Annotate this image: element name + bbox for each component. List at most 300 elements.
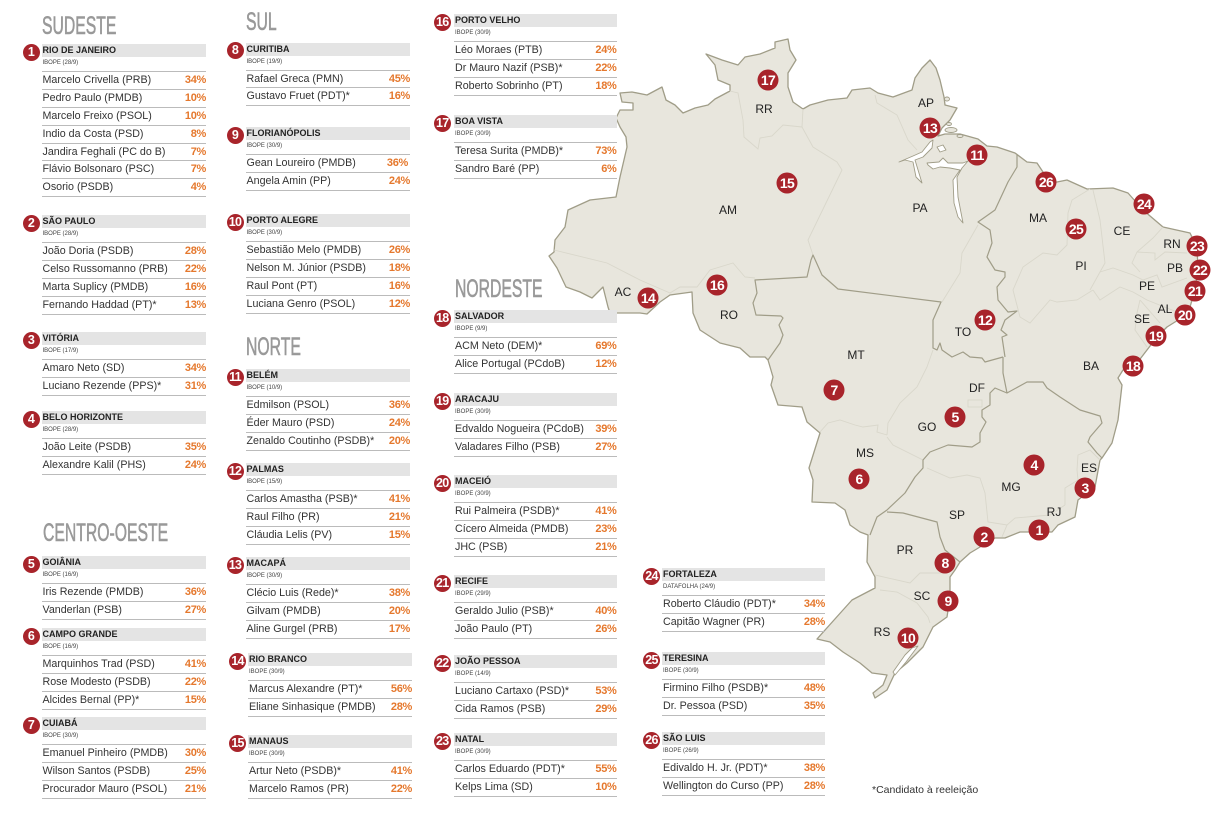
panel: Rio de Janeiro [23,44,206,197]
panel: Cuiabá: 25% [185,765,206,777]
panel: Belo Horizonte: IBOPE (28/9) [42,427,78,433]
panel: Rio Branco: IBOPE (30/9) [249,669,285,675]
panel: Natal: IBOPE (30/9) [455,749,491,755]
city marker numbers: 26 [1039,174,1054,190]
panel: Salvador: 69% [595,340,616,352]
panel: Palmas: Carlos Amastha (PSB)* [246,493,358,505]
panel: Natal [434,733,617,797]
panel: Porto Alegre: Raul Pont (PT) [246,280,317,292]
state labels: PR [897,543,914,557]
panel: Rio de Janeiro: Pedro Paulo (PMDB) [42,92,142,104]
panel: Cuiabá: 30% [185,747,206,759]
panel: Curitiba: IBOPE (19/9) [246,58,282,64]
city marker numbers: 5 [951,409,959,425]
panel: Teresina: Dr. Pessoa (PSD) [663,700,747,712]
panel: Teresina [643,652,825,716]
panel: Vitória: IBOPE (17/9) [42,348,78,354]
panel: Fortaleza: Roberto Cláudio (PDT)* [663,598,776,610]
panel: Porto Alegre: 12% [389,298,410,310]
panel: Recife [434,575,617,639]
state labels: MG [1001,480,1021,494]
state labels: RJ [1047,505,1061,519]
panel: São Paulo: 28% [185,245,206,257]
panel: Macapá: MACAPÁ [246,558,286,568]
panel: Goiânia: 5 [28,556,34,570]
city marker numbers: 4 [1030,457,1038,473]
city marker numbers: 19 [1149,328,1164,344]
city marker numbers: 16 [710,277,725,293]
panel: Aracaju [434,393,617,457]
panel: Teresina: 35% [804,700,825,712]
panel: Salvador [434,310,617,374]
heading: Sul: SUL [246,8,277,36]
panel: São Paulo: João Doria (PSDB) [42,245,133,257]
panel: Aracaju: Edvaldo Nogueira (PCdoB) [455,423,584,435]
state labels: MT [847,348,865,362]
panel: Recife: Geraldo Julio (PSB)* [455,605,554,617]
panel: Florianópolis: 36% [387,157,408,169]
panel: Porto Alegre: IBOPE (30/9) [246,230,282,236]
panel: Palmas: PALMAS [246,464,284,474]
panel: Campo Grande: 41% [185,658,206,670]
city marker numbers: 1 [1035,522,1043,538]
panel: Belém: 24% [389,417,410,429]
panel: Teresina: IBOPE (30/9) [663,668,699,674]
panel: Porto Alegre: PORTO ALEGRE [246,215,318,225]
panel: Vitória: Amaro Neto (SD) [42,362,124,374]
panel: Campo Grande: Alcides Bernal (PP)* [42,694,139,706]
panel: Palmas: Raul Filho (PR) [246,511,320,523]
panel: Maceió: Cícero Almeida (PMDB) [455,523,568,535]
panel: Manaus: 22% [391,783,412,795]
panel: Curitiba: 8 [232,43,238,57]
panel: Rio de Janeiro: 10% [185,110,206,122]
state labels: RS [874,625,890,639]
panel: Vitória: 31% [185,380,206,392]
panel: Rio de Janeiro: 7% [191,146,206,158]
panel: Belém: Zenaldo Coutinho (PSDB)* [246,435,374,447]
panel: Rio Branco [229,653,412,717]
city marker numbers: 18 [1126,358,1141,374]
panel: Manaus: 15 [231,736,244,750]
panel: Belo Horizonte: João Leite (PSDB) [42,441,131,453]
panel: Florianópolis: 9 [232,128,238,142]
panel: Campo Grande [23,628,206,710]
panel: Rio de Janeiro: Flávio Bolsonaro (PSC) [42,163,154,175]
panel: Natal: NATAL [455,734,484,744]
panel: Natal: Kelps Lima (SD) [455,781,533,793]
panel: Maceió: JHC (PSB) [455,541,507,553]
panel: Rio de Janeiro: 8% [191,128,206,140]
state labels: SE [1134,312,1150,326]
panel: Belém: BELÉM [246,370,278,380]
panel: Rio Branco: RIO BRANCO [249,654,307,664]
panel: Porto Velho: 18% [595,80,616,92]
panel: Maceió: 21% [595,541,616,553]
panel: Porto Velho: Léo Moraes (PTB) [455,44,542,56]
panel: Natal: 10% [595,781,616,793]
city marker numbers: 13 [923,120,938,136]
panel: João Pessoa: 22 [436,656,449,670]
panel: Campo Grande: IBOPE (16/9) [42,644,78,650]
state labels: AP [918,96,934,110]
panel: Recife: 21 [436,576,449,590]
panel: Aracaju: Valadares Filho (PSB) [455,441,560,453]
panel: São Paulo: Celso Russomanno (PRB) [42,263,168,275]
panel: Boa Vista: 6% [601,163,616,175]
panel: Macapá: Clécio Luis (Rede)* [246,587,339,599]
panel: Manaus [229,735,412,799]
panel: Campo Grande: 6 [28,628,34,642]
city marker numbers [641,72,1208,646]
panel: Florianópolis: FLORIANÓPOLIS [246,128,320,138]
panel: Porto Alegre: Luciana Genro (PSOL) [246,298,355,310]
panel: Curitiba: CURITIBA [246,44,290,54]
panel: Salvador: IBOPE (9/9) [455,326,487,332]
city marker numbers: 11 [970,147,985,163]
panel: Boa Vista: BOA VISTA [455,116,503,126]
city marker numbers: 15 [780,175,795,191]
panel: Rio Branco: Eliane Sinhasique (PMDB) [249,701,376,713]
panel: Campo Grande: 22% [185,676,206,688]
panel: Fortaleza: FORTALEZA [663,569,717,579]
panel: Manaus: IBOPE (30/9) [249,751,285,757]
panel: Natal: 23 [436,734,449,748]
panel: Recife: 40% [595,605,616,617]
panel: Macapá [227,557,410,639]
panel: Rio de Janeiro: Jandira Feghali (PC do B) [42,146,165,158]
panel: João Pessoa: 29% [595,703,616,715]
panel: Goiânia: Vanderlan (PSB) [42,604,122,616]
panel: Campo Grande: Rose Modesto (PSDB) [42,676,151,688]
panel: Teresina: 25 [645,652,658,666]
panel: Porto Alegre: 16% [389,280,410,292]
panel: Manaus: Artur Neto (PSDB)* [249,765,341,777]
panel: João Pessoa: JOÃO PESSOA [455,656,521,666]
state labels: PE [1139,279,1155,293]
panel: Manaus: MANAUS [249,736,288,746]
city marker numbers: 12 [978,312,993,328]
panel: Belo Horizonte: 35% [185,441,206,453]
panel: Palmas: 12 [229,464,241,478]
panel: Rio de Janeiro: Osorio (PSDB) [42,181,113,193]
panel: Recife: João Paulo (PT) [455,623,532,635]
panel: Cuiabá: 21% [185,783,206,795]
panel: Maceió: Rui Palmeira (PSDB)* [455,505,560,517]
panel: Rio de Janeiro: IBOPE (28/9) [42,60,78,66]
panel: São Luis: Edivaldo H. Jr. (PDT)* [663,762,768,774]
panel: Belém: 20% [389,435,410,447]
panel: Fortaleza: DATAFOLHA (24/9) [663,584,715,590]
panel: São Paulo: SÃO PAULO [42,216,95,226]
city marker numbers: 21 [1188,283,1203,299]
panel: Porto Velho: IBOPE (30/9) [455,30,491,36]
state labels: SP [949,508,965,522]
panel: Cuiabá: CUIABÁ [42,718,78,728]
panel: Aracaju: 19 [436,394,449,408]
panel: Palmas: 15% [389,529,410,541]
panel: Porto Velho: Dr Mauro Nazif (PSB)* [455,62,562,74]
panel: Porto Alegre: 18% [389,262,410,274]
panel: Palmas: Cláudia Lelis (PV) [246,529,332,541]
panel: São Paulo [23,215,206,315]
panel: Campo Grande: CAMPO GRANDE [42,629,118,639]
panel: Belo Horizonte: BELO HORIZONTE [42,412,123,422]
city marker numbers: 6 [855,471,863,487]
city marker numbers: 14 [641,290,656,306]
panel: Palmas: IBOPE (15/9) [246,479,282,485]
panel: Rio de Janeiro: Marcelo Freixo (PSOL) [42,110,152,122]
panel: Belém: Éder Mauro (PSD) [246,417,334,429]
footnote: *Candidato à reeleição [872,784,978,796]
state labels: CE [1114,224,1130,238]
panel: Boa Vista: 73% [595,145,616,157]
panel: São Luis: Wellington do Curso (PP) [663,780,783,792]
panel: Porto Alegre: Nelson M. Júnior (PSDB) [246,262,366,274]
panel: Cuiabá [23,717,206,799]
city marker numbers: 23 [1190,238,1205,254]
panel: João Pessoa: Luciano Cartaxo (PSD)* [455,685,569,697]
panel: Vitória: 34% [185,362,206,374]
panel: Manaus: Marcelo Ramos (PR) [249,783,349,795]
city marker numbers: 2 [980,529,988,545]
panel: Belo Horizonte [23,411,206,475]
country silhouette [549,39,1198,698]
panel: João Pessoa: 53% [595,685,616,697]
state labels: AC [615,285,632,299]
dark regional borders [753,155,1102,562]
panel: Salvador: Alice Portugal (PCdoB) [455,358,565,370]
panel: João Pessoa: Cida Ramos (PSB) [455,703,545,715]
panel: Maceió: 23% [595,523,616,535]
panel: Cuiabá: Emanuel Pinheiro (PMDB) [42,747,168,759]
panel: Rio de Janeiro: Indio da Costa (PSD) [42,128,143,140]
panel: Porto Alegre [227,214,410,314]
panel: Salvador: 12% [595,358,616,370]
city marker numbers: 25 [1069,221,1084,237]
panel: Vitória: VITÓRIA [42,333,79,343]
city markers [638,70,1210,648]
state labels: MS [856,446,874,460]
panel: Maceió: MACEIÓ [455,476,491,486]
city marker numbers: 7 [830,382,838,398]
panel: São Luis: IBOPE (26/9) [663,748,699,754]
panel: Goiânia: 27% [185,604,206,616]
panel: Salvador: SALVADOR [455,311,504,321]
panel: Manaus: 41% [391,765,412,777]
panel: Boa Vista: Sandro Baré (PP) [455,163,539,175]
panel: Vitória: 3 [28,332,34,346]
panel: Maceió: IBOPE (30/9) [455,491,491,497]
panel: Porto Alegre: 10 [229,214,241,228]
panel: São Luis: 28% [804,780,825,792]
heading: Centro-Oeste: CENTRO-OESTE [43,519,168,547]
panel: Curitiba: 16% [389,90,410,102]
panel: Florianópolis: IBOPE (30/9) [246,143,282,149]
panel: Teresina: TERESINA [663,653,709,663]
panel: Florianópolis: Gean Loureiro (PMDB) [246,157,356,169]
panel: Boa Vista: Teresa Surita (PMDB)* [455,145,563,157]
panel: Rio Branco: Marcus Alexandre (PT)* [249,683,362,695]
panel: Macapá: 20% [389,605,410,617]
panel: Fortaleza: Capitão Wagner (PR) [663,616,765,628]
panel: Aracaju: 39% [595,423,616,435]
panel: Salvador: 18 [436,310,449,324]
state labels: GO [918,420,936,434]
panel: Recife: 26% [595,623,616,635]
panel: Cuiabá: 7 [28,718,34,732]
panel: Boa Vista: 17 [436,116,449,130]
state labels: PB [1167,261,1183,275]
panel: Porto Velho: 22% [595,62,616,74]
panel: Rio de Janeiro: 4% [191,181,206,193]
panel: Campo Grande: 15% [185,694,206,706]
panel: Curitiba: Rafael Greca (PMN) [246,72,343,84]
panel: Macapá: 17% [389,623,410,635]
panel: Rio de Janeiro: 10% [185,92,206,104]
state labels: RR [755,102,773,116]
panel: São Paulo: 2 [28,216,34,230]
heading: Sudeste: SUDESTE [42,12,116,40]
state labels: ES [1081,461,1097,475]
city marker numbers: 3 [1081,480,1089,496]
panel: Boa Vista [434,115,617,179]
panel: Recife: IBOPE (29/9) [455,591,491,597]
panel: Macapá: 38% [389,587,410,599]
panel: Porto Velho: Roberto Sobrinho (PT) [455,80,563,92]
coastal islands [944,97,963,138]
panel: Aracaju: IBOPE (30/9) [455,409,491,415]
panel: Cuiabá: Procurador Mauro (PSOL) [42,783,167,795]
panel: Cuiabá: IBOPE (30/9) [42,733,78,739]
panel: Aracaju: 27% [595,441,616,453]
panel: São Luis: 26 [645,732,658,746]
panel: Maceió: 41% [595,505,616,517]
panel: Goiânia [23,556,206,620]
panel: Natal: 55% [595,763,616,775]
panel: São Paulo: 16% [185,281,206,293]
state labels: PI [1075,259,1087,273]
panel: Maceió [434,475,617,557]
panel: Recife: RECIFE [455,576,488,586]
panel: Rio Branco: 14 [231,654,244,668]
panel: João Pessoa: IBOPE (14/9) [455,671,491,677]
panel: Porto Alegre: Sebastião Melo (PMDB) [246,244,361,256]
panel: Rio de Janeiro: 34% [185,74,206,86]
panel: Florianópolis: 24% [389,175,410,187]
panel: Belém: Edmilson (PSOL) [246,399,329,411]
panel: Rio de Janeiro: 1 [28,44,34,58]
state labels: AM [719,203,737,217]
panel: Porto Alegre: 26% [389,244,410,256]
panel: Palmas [227,463,410,545]
panel: Belo Horizonte: Alexandre Kalil (PHS) [42,459,146,471]
heading: Norte: NORTE [246,333,301,361]
state labels: PA [912,201,928,215]
panel: Macapá: IBOPE (30/9) [246,573,282,579]
panel: Vitória: Luciano Rezende (PPS)* [42,380,161,392]
panel: Fortaleza [643,568,825,632]
panel: Porto Velho: 24% [595,44,616,56]
city marker numbers: 10 [901,630,916,646]
panel: Rio de Janeiro: 7% [191,163,206,175]
panel: Belo Horizonte: 24% [185,459,206,471]
city marker numbers: 20 [1178,307,1193,323]
state labels: MA [1029,211,1047,225]
city marker numbers: 17 [761,72,776,88]
panel: Florianópolis: Angela Amin (PP) [246,175,331,187]
panel: São Paulo: IBOPE (28/9) [42,231,78,237]
panel: Florianópolis [227,127,410,191]
panel: Fortaleza: 24 [645,568,658,582]
panel: São Paulo: Marta Suplicy (PMDB) [42,281,148,293]
panel: Belém: IBOPE (10/9) [246,385,282,391]
panel: Macapá: Aline Gurgel (PRB) [246,623,337,635]
panel: Goiânia: 36% [185,586,206,598]
panel: Natal: Carlos Eduardo (PDT)* [455,763,565,775]
panel: Fortaleza: 34% [804,598,825,610]
panel: Palmas: 41% [389,493,410,505]
state labels: RN [1163,237,1181,251]
state labels: BA [1083,359,1099,373]
panel: Rio Branco: 56% [391,683,412,695]
panel: Teresina: Firmino Filho (PSDB)* [663,682,768,694]
panel: Belém: 36% [389,399,410,411]
panel: Goiânia: Iris Rezende (PMDB) [42,586,143,598]
panel: Belo Horizonte: 4 [28,412,34,426]
heading: Nordeste: NORDESTE [455,275,543,303]
panel: Aracaju: ARACAJU [455,394,499,404]
panel: São Luis: SÃO LUIS [663,733,706,743]
panel: Salvador: ACM Neto (DEM)* [455,340,542,352]
state labels: DF [969,381,985,395]
panel: Boa Vista: IBOPE (30/9) [455,131,491,137]
panel: Palmas: 21% [389,511,410,523]
panel: Fortaleza: 28% [804,616,825,628]
panel: João Pessoa [434,655,617,719]
panel: Curitiba: 45% [389,72,410,84]
panel: Rio de Janeiro: RIO DE JANEIRO [42,45,116,55]
state labels [615,96,1183,639]
rivers and lagoons [893,140,968,675]
panel: Cuiabá: Wilson Santos (PSDB) [42,765,150,777]
panel: Maceió: 20 [436,476,449,490]
city marker numbers: 24 [1137,196,1152,212]
panel: Vitória [23,332,206,396]
state labels: RO [720,308,738,322]
panel: São Paulo: 22% [185,263,206,275]
light state borders [554,91,1187,623]
state labels: AL [1158,302,1173,316]
state labels: TO [955,325,971,339]
city marker numbers: 8 [941,555,949,571]
panel: Porto Velho: PORTO VELHO [455,15,520,25]
panel: São Paulo: 13% [185,299,206,311]
panel: Campo Grande: Marquinhos Trad (PSD) [42,658,155,670]
panel: Macapá: Gilvam (PMDB) [246,605,321,617]
panel: Goiânia: IBOPE (16/9) [42,572,78,578]
city marker numbers: 22 [1193,262,1208,278]
panel: Rio Branco: 28% [391,701,412,713]
panel: Curitiba [227,42,410,106]
panel: São Paulo: Fernando Haddad (PT)* [42,299,157,311]
state labels: SC [914,589,931,603]
panel: São Luis: 38% [804,762,825,774]
panel: Teresina: 48% [804,682,825,694]
panel: São Luis [643,732,825,796]
panel: Goiânia: GOIÂNIA [42,557,81,567]
city marker numbers: 9 [944,593,952,609]
